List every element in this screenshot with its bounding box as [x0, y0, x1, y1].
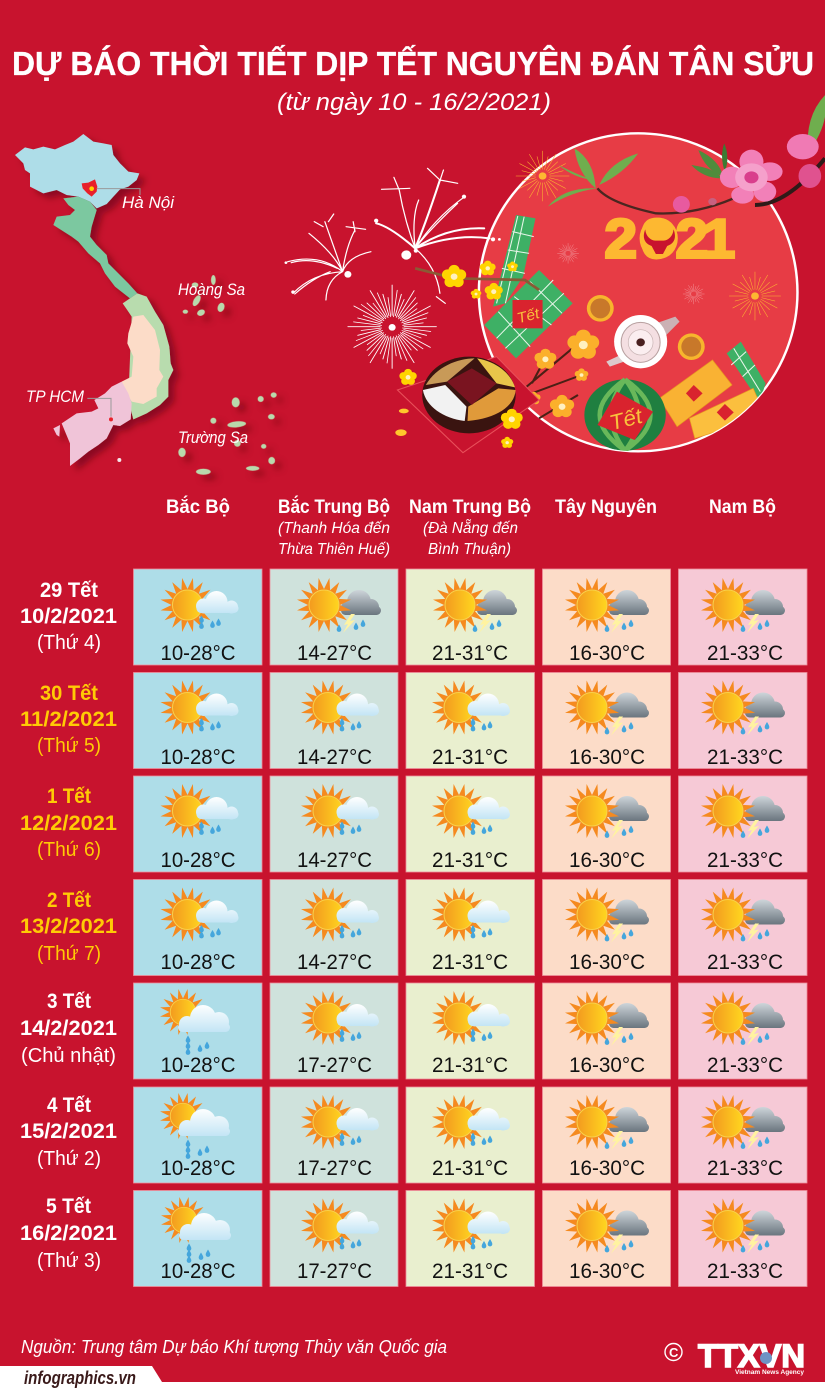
orange and white sparks	[516, 151, 781, 320]
cell: Bắc Trung Bộ	[270, 880, 398, 976]
header: Bắc Bộ: Bắc Bộ	[166, 496, 230, 518]
cell: Nam Trung Bộ: 21-31°C	[432, 1054, 508, 1077]
date label: 12/2/2021	[20, 812, 117, 835]
cell: Nam Trung Bộ	[406, 1190, 534, 1286]
cell: Bắc Trung Bộ: 17-27°C	[297, 1157, 372, 1180]
header: Nam Trung Bộ	[409, 497, 531, 558]
cell: Bắc Trung Bộ: 17-27°C	[297, 1054, 372, 1077]
label: TP HCM: TP HCM	[26, 387, 85, 406]
cell: Nam Bộ: 21-33°C	[707, 849, 783, 872]
cell: Nam Trung Bộ: 21-31°C	[432, 1157, 508, 1180]
date label: 1 Tết	[47, 785, 91, 808]
watermelon and red envelopes: Tết	[607, 403, 646, 435]
cell: Nam Bộ	[678, 569, 807, 665]
cell: Nam Bộ	[678, 1087, 807, 1183]
footer site name: infographics.vn	[24, 1368, 136, 1388]
date label: 30 Tết	[40, 682, 98, 705]
cell: Bắc Trung Bộ: 14-27°C	[297, 746, 372, 769]
date label: 11/2/2021	[20, 708, 117, 731]
cell: Bắc Bộ	[134, 1190, 262, 1286]
cell: Nam Trung Bộ	[406, 776, 534, 872]
apricot blossoms in circle	[527, 330, 599, 418]
cell: Tây Nguyên: 16-30°C	[569, 849, 645, 872]
cell: Bắc Bộ	[134, 776, 262, 872]
illustration: Tet fireworks, food and blossoms	[285, 95, 825, 453]
logo: TTXVN: TTXVN	[698, 1338, 805, 1374]
banh chung and banh tet	[484, 215, 573, 358]
header: Bắc Trung Bộ: Thừa Thiên Huế)	[278, 541, 390, 558]
header: Nam Trung Bộ: (Đà Nẵng đến	[423, 518, 518, 537]
date label: 13/2/2021	[20, 915, 117, 938]
2021 label: 2021	[605, 209, 735, 270]
circle panel	[479, 133, 797, 451]
date label: 4 Tết	[47, 1094, 91, 1117]
cell: Bắc Trung Bộ	[270, 1190, 398, 1286]
cell: Tây Nguyên	[542, 983, 670, 1079]
cell: Bắc Bộ	[134, 569, 262, 665]
cell: Tây Nguyên: 16-30°C	[569, 642, 645, 665]
date label: 16/2/2021	[20, 1222, 117, 1245]
row: 4 Tết	[20, 1087, 807, 1183]
row: 29 Tết	[20, 569, 807, 665]
cell: Nam Trung Bộ: 21-31°C	[432, 746, 508, 769]
cell: Nam Bộ: 21-33°C	[707, 1260, 783, 1283]
cell: Bắc Trung Bộ	[270, 776, 398, 872]
date label	[20, 990, 117, 1067]
cell: Bắc Trung Bộ	[270, 672, 398, 769]
cell: Nam Bộ: 21-33°C	[707, 1157, 783, 1180]
cell: Nam Bộ	[678, 983, 807, 1079]
date label	[20, 785, 117, 861]
cell: Nam Bộ: 21-33°C	[707, 746, 783, 769]
cell: Bắc Bộ: 10-28°C	[160, 1157, 236, 1180]
header: Nam Trung Bộ: Bình Thuận)	[428, 541, 511, 558]
cell: Nam Trung Bộ	[406, 983, 534, 1079]
date label	[20, 682, 117, 757]
tea set	[587, 295, 705, 368]
cell: Bắc Trung Bộ: 14-27°C	[297, 849, 372, 872]
cell: Bắc Bộ: 10-28°C	[160, 1260, 236, 1283]
cell: Nam Trung Bộ	[406, 672, 534, 769]
cell: Nam Bộ	[678, 1190, 807, 1286]
watermelon and red envelopes	[584, 342, 766, 451]
date label: 15/2/2021	[20, 1120, 117, 1143]
cell: Tây Nguyên: 16-30°C	[569, 746, 645, 769]
date label: (Thứ 3)	[37, 1250, 101, 1272]
cell: Nam Bộ	[678, 672, 807, 769]
footer band	[0, 1366, 825, 1393]
header: Bắc Trung Bộ	[278, 496, 390, 558]
cell: Bắc Bộ: 10-28°C	[160, 849, 236, 872]
date label: 5 Tết	[46, 1195, 91, 1218]
cell: Bắc Bộ	[134, 983, 262, 1079]
cell: Nam Trung Bộ	[406, 880, 534, 976]
cell: Tây Nguyên: 16-30°C	[569, 1054, 645, 1077]
source line: Nguồn: Trung tâm Dự báo Khí tượng Thủy văn Quốc gia	[21, 1337, 447, 1357]
yellow blossom branch	[395, 261, 539, 448]
cell: Nam Trung Bộ	[406, 1087, 534, 1183]
label: Hà Nội: Hà Nội	[122, 193, 175, 212]
cell: Bắc Trung Bộ	[270, 1087, 398, 1183]
cell: Nam Bộ	[678, 880, 807, 976]
banh chung and banh tet: Tết	[515, 305, 542, 327]
cell: Tây Nguyên	[542, 1087, 670, 1183]
date label: (Thứ 5)	[37, 735, 101, 757]
cell: Bắc Bộ	[134, 672, 262, 769]
date label: 14/2/2021	[20, 1017, 117, 1040]
row: 3 Tết	[20, 983, 807, 1079]
cell: Nam Bộ	[678, 776, 807, 872]
map of Vietnam	[15, 134, 277, 475]
subtitle: (từ ngày 10 - 16/2/2021)	[277, 89, 551, 116]
cell: Tây Nguyên	[542, 880, 670, 976]
cell: Nam Bộ: 21-33°C	[707, 951, 783, 974]
cell: Tây Nguyên: 16-30°C	[569, 1260, 645, 1283]
row: 1 Tết	[20, 776, 807, 872]
cell: Bắc Bộ: 10-28°C	[160, 746, 236, 769]
cell: Tây Nguyên: 16-30°C	[569, 951, 645, 974]
row: 2 Tết	[20, 880, 807, 976]
logo: TTXVN: Vietnam News Agency	[735, 1369, 804, 1376]
column headers	[166, 496, 776, 558]
cell: Bắc Bộ: 10-28°C	[160, 1054, 236, 1077]
header: Bắc Trung Bộ: Bắc Trung Bộ	[278, 496, 390, 518]
food tray on red mat	[397, 357, 539, 453]
cell: Nam Trung Bộ	[406, 569, 534, 665]
date label: 3 Tết	[47, 990, 91, 1013]
date label: 29 Tết	[40, 579, 98, 602]
date label: (Thứ 6)	[37, 839, 101, 861]
peach branch with pink flowers	[548, 95, 825, 213]
title: DỰ BÁO THỜI TIẾT DỊP TẾT NGUYÊN ĐÁN TÂN SỬU	[12, 45, 814, 82]
date label	[20, 579, 117, 654]
header: Nam Bộ: Nam Bộ	[709, 497, 776, 518]
cell: Bắc Trung Bộ: 17-27°C	[297, 1260, 372, 1283]
cell: Nam Trung Bộ: 21-31°C	[432, 951, 508, 974]
date label: (Chủ nhật)	[21, 1045, 116, 1067]
cell: Nam Trung Bộ: 21-31°C	[432, 1260, 508, 1283]
fireworks	[288, 168, 489, 368]
date label	[20, 1094, 117, 1170]
date label: 2 Tết	[47, 889, 91, 912]
date label: (Thứ 7)	[37, 943, 101, 965]
date label	[20, 1195, 117, 1272]
logo: TTXVN: C	[669, 1345, 679, 1360]
cell: Nam Trung Bộ: 21-31°C	[432, 849, 508, 872]
header: Bắc Trung Bộ: (Thanh Hóa đến	[278, 520, 390, 537]
date label: (Thứ 2)	[37, 1148, 101, 1170]
cell: Nam Trung Bộ: 21-31°C	[432, 642, 508, 665]
cell: Bắc Trung Bộ: 14-27°C	[297, 951, 372, 974]
cell: Bắc Bộ	[134, 1087, 262, 1183]
cell: Bắc Trung Bộ: 14-27°C	[297, 642, 372, 665]
cell: Tây Nguyên	[542, 672, 670, 769]
cell: Bắc Bộ: 10-28°C	[160, 642, 236, 665]
cell: Tây Nguyên	[542, 776, 670, 872]
date label: (Thứ 4)	[37, 632, 101, 654]
date label	[20, 889, 117, 965]
cell: Bắc Trung Bộ	[270, 983, 398, 1079]
cell: Nam Bộ: 21-33°C	[707, 1054, 783, 1077]
cell: Tây Nguyên: 16-30°C	[569, 1157, 645, 1180]
cell: Bắc Trung Bộ	[270, 569, 398, 665]
row: 5 Tết	[20, 1190, 807, 1286]
date label: 10/2/2021	[20, 605, 117, 628]
header: Tây Nguyên: Tây Nguyên	[555, 497, 657, 518]
row: 30 Tết	[20, 672, 807, 769]
cell: Tây Nguyên	[542, 1190, 670, 1286]
cell: Bắc Bộ	[134, 880, 262, 976]
label: Hoàng Sa: Hoàng Sa	[178, 280, 245, 299]
header: Nam Trung Bộ: Nam Trung Bộ	[409, 497, 531, 518]
cell: Nam Bộ: 21-33°C	[707, 642, 783, 665]
label: Trường Sa: Trường Sa	[178, 428, 248, 447]
cell: Tây Nguyên	[542, 569, 670, 665]
cell: Bắc Bộ: 10-28°C	[160, 951, 236, 974]
